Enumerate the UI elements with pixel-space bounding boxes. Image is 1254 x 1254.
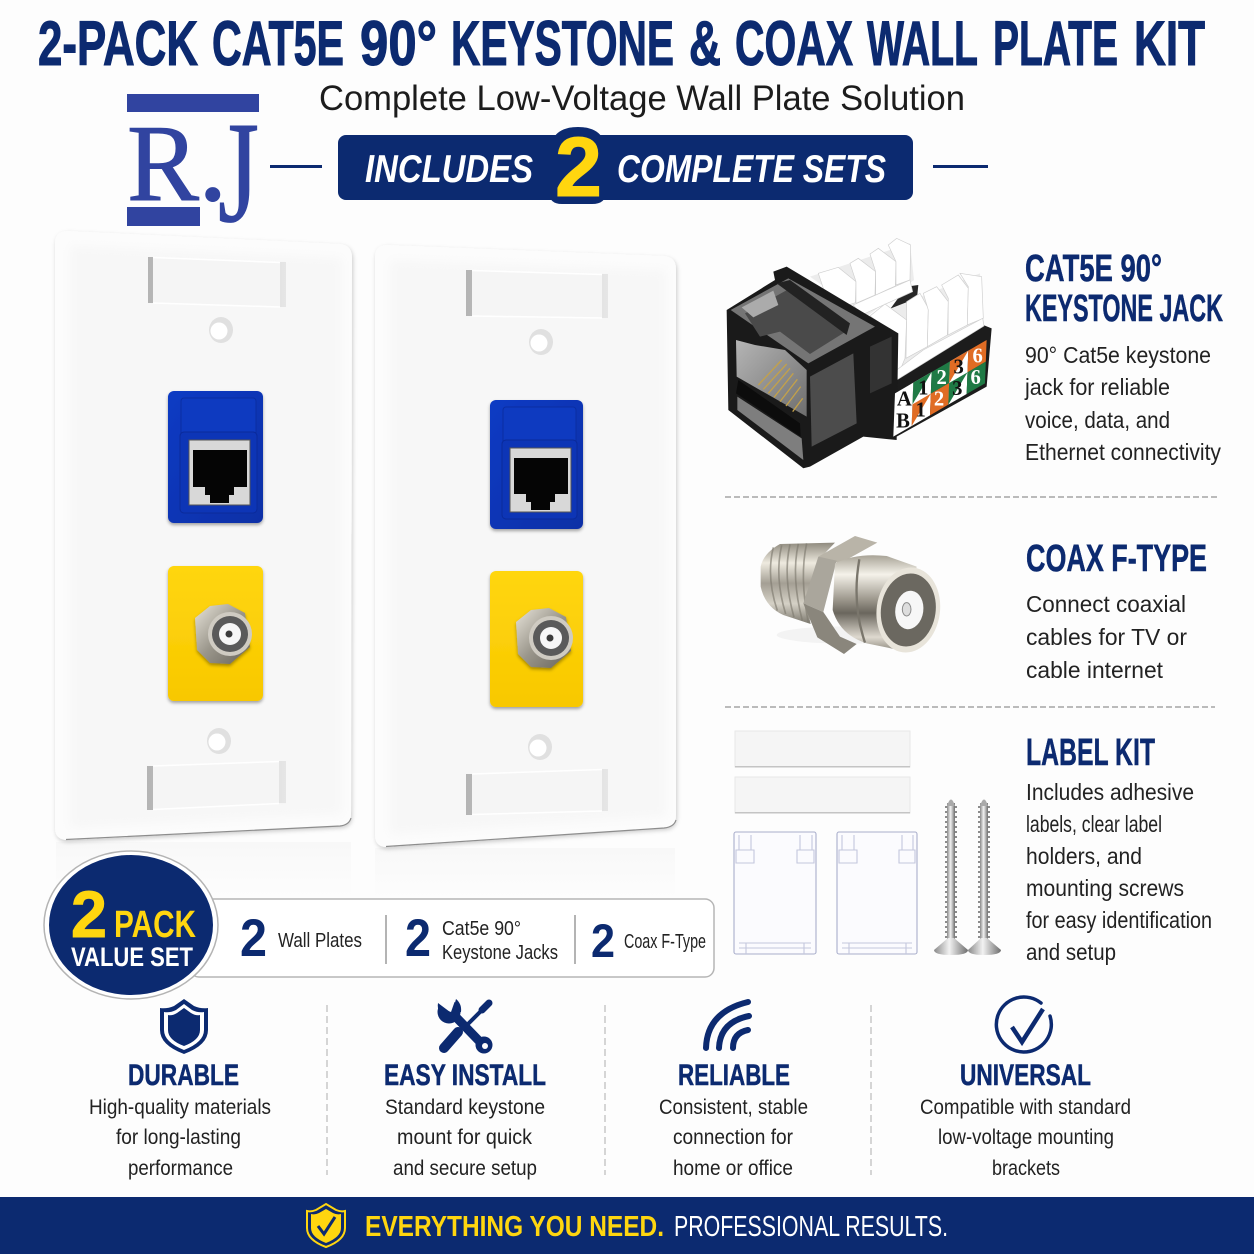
text: label kit: mounting screws: [1026, 875, 1184, 901]
product: cat5e keystone jack: [727, 238, 992, 468]
wiring colour label strip: 3: [953, 356, 964, 378]
count: wall plates: 2: [240, 909, 267, 968]
title: 2-PACK: [38, 9, 198, 79]
label window top: [148, 257, 286, 307]
wiring colour label strip: 2: [934, 389, 944, 411]
plate reflections: [56, 842, 675, 898]
text: label kit: and setup: [1026, 939, 1116, 965]
feature: durable: DURABLE: [128, 1059, 239, 1092]
feature: easy install: [384, 994, 546, 1180]
title: KEYSTONE: [451, 9, 674, 79]
feature: reliable: [659, 1002, 808, 1180]
feature: reliable: RELIABLE: [678, 1059, 790, 1092]
yellow coax module: [168, 566, 263, 701]
wiring colour label strip: A: [897, 388, 912, 410]
title: CAT5E: [212, 9, 344, 79]
footer band: PROFESSIONAL RESULTS.: [674, 1211, 948, 1243]
text: reliable: home or office: [673, 1156, 793, 1180]
text: universal: [920, 1095, 1131, 1180]
feature: universal: UNIVERSAL: [960, 1059, 1091, 1092]
text: easy install: Standard keystone: [385, 1095, 545, 1119]
clear label holders: [734, 832, 917, 954]
blue keystone module: [490, 400, 583, 529]
wiring colour label strip: [893, 340, 987, 437]
text: reliable: Consistent, stable: [659, 1095, 808, 1119]
footer band: EVERYTHING YOU NEED.: [365, 1211, 664, 1243]
text: label kit: for easy identification: [1026, 907, 1212, 933]
badge: 2 pack value set: VALUE SET: [71, 942, 193, 972]
count: keystone jacks: 2: [405, 909, 431, 968]
text: durable: High-quality materials: [89, 1095, 271, 1119]
mounting screws: [934, 800, 1001, 955]
heading: cat5e keystone jack: CAT5E 90°: [1025, 248, 1162, 290]
mounting hole top: [529, 329, 553, 355]
wiring colour label strip: 3: [952, 378, 962, 400]
footer band: [0, 1197, 1254, 1254]
text: cat5e keystone jack: voice, data, and: [1025, 407, 1170, 433]
wall plate 1: [55, 231, 352, 840]
icon: signal waves: [706, 1002, 749, 1048]
icon: wrench and screwdriver: [437, 994, 492, 1054]
banner: includes 2 complete sets: COMPLETE SETS: [617, 148, 886, 191]
wiring colour label strip: 6: [970, 367, 981, 389]
badge: 2 pack value set: 2: [71, 877, 107, 951]
text: cat5e keystone jack: jack for reliable: [1024, 374, 1170, 400]
label window bottom: [466, 769, 608, 815]
icon: shield: [160, 999, 208, 1054]
heading: label kit: LABEL KIT: [1026, 732, 1155, 774]
wiring colour label strip: 1: [918, 378, 928, 400]
title: 90°: [360, 9, 437, 79]
text: coax f-type: [1026, 591, 1187, 683]
count: wall plates: Wall Plates: [278, 930, 362, 952]
heading: cat5e keystone jack: [1025, 248, 1223, 330]
count: keystone jacks: Cat5e 90°: [442, 918, 521, 940]
title: &: [689, 9, 721, 79]
logo: R.J: .: [198, 95, 228, 226]
text: durable: for long-lasting: [116, 1125, 241, 1149]
wiring colour label strip: 2: [936, 367, 947, 389]
count: coax f-type: 2: [591, 914, 615, 967]
feature: durable: [89, 999, 271, 1180]
text: label kit: Includes adhesive: [1026, 779, 1194, 805]
text: cat5e keystone jack: 90° Cat5e keystone: [1025, 342, 1211, 368]
count: coax f-type: [591, 914, 706, 967]
text: label kit: [1026, 779, 1212, 965]
text: universal: Compatible with standard: [920, 1095, 1131, 1119]
banner: includes 2 complete sets: INCLUDES: [365, 148, 533, 191]
text: label kit: holders, and: [1026, 843, 1142, 869]
adhesive label strips: [735, 731, 910, 814]
badge: 2 pack value set: [44, 851, 218, 999]
subtitle: Complete Low-Voltage Wall Plate Solution: [319, 79, 965, 118]
feature: universal: [920, 997, 1131, 1180]
wall plate 2: [375, 245, 676, 847]
text: durable: [89, 1095, 271, 1180]
blue keystone module: [168, 391, 263, 523]
logo: R.J: R: [127, 103, 199, 224]
count: wall plates: [240, 909, 362, 968]
text: easy install: mount for quick: [397, 1125, 532, 1149]
text: reliable: connection for: [673, 1125, 793, 1149]
text: easy install: [385, 1095, 545, 1180]
title: COAX: [735, 9, 853, 79]
wiring colour label strip: 1: [915, 399, 926, 421]
text: universal: low-voltage mounting: [938, 1125, 1114, 1149]
text: coax f-type: cables for TV or: [1026, 624, 1187, 650]
count: coax f-type: Coax F-Type: [624, 931, 706, 953]
wiring colour label strip: 6: [972, 346, 983, 368]
count: keystone jacks: [405, 909, 558, 968]
label window bottom: [147, 761, 286, 810]
logo: R.J: [127, 93, 259, 253]
banner: includes 2 complete sets: [270, 120, 988, 214]
mounting hole bottom: [528, 734, 552, 760]
banner: includes 2 complete sets: 2: [555, 120, 602, 214]
logo: R.J: J: [218, 93, 259, 253]
title: [38, 9, 1205, 79]
yellow coax module: [490, 571, 583, 707]
product: coax f-type connector: [761, 536, 946, 657]
title: KIT: [1134, 9, 1205, 79]
text: universal: brackets: [992, 1156, 1060, 1180]
text: durable: performance: [128, 1156, 233, 1180]
icon: check circle: [996, 997, 1051, 1052]
text: coax f-type: cable internet: [1026, 657, 1164, 683]
title: PLATE: [993, 9, 1118, 79]
text: reliable: [659, 1095, 808, 1180]
contents strip: [190, 899, 714, 977]
text: cat5e keystone jack: [1024, 342, 1221, 465]
title: WALL: [867, 9, 978, 79]
text: easy install: and secure setup: [393, 1156, 537, 1180]
text: cat5e keystone jack: Ethernet connectivity: [1025, 439, 1221, 465]
count: keystone jacks: Keystone Jacks: [442, 942, 558, 964]
label window top: [466, 270, 608, 318]
text: label kit: labels, clear label: [1026, 811, 1162, 837]
mounting hole bottom: [207, 728, 231, 754]
mounting hole top: [209, 317, 233, 343]
icon: shield check: [307, 1204, 345, 1247]
badge: 2 pack value set: PACK: [114, 904, 196, 946]
text: coax f-type: Connect coaxial: [1026, 591, 1186, 617]
feature: easy install: EASY INSTALL: [384, 1059, 546, 1092]
wiring colour label strip: B: [896, 410, 910, 432]
